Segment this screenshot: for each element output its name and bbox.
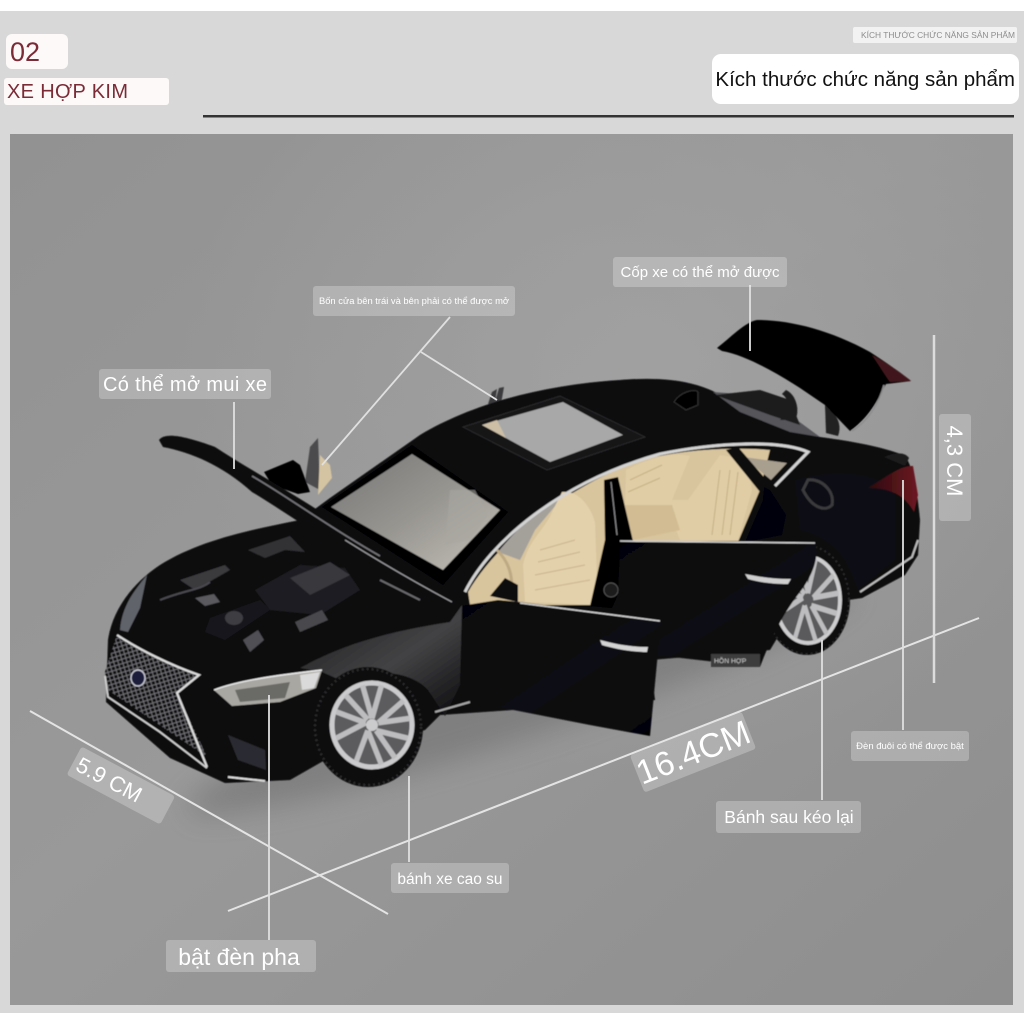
rear door frame (745, 487, 786, 542)
rear wheel (764, 545, 850, 655)
rear bumper chrome (860, 540, 918, 592)
small caption (853, 27, 1017, 43)
steering wheel (497, 550, 512, 600)
car body (106, 379, 920, 783)
grille (105, 635, 207, 768)
series number badge (6, 34, 68, 69)
roof sheen (430, 383, 735, 480)
trunk opening highlight (713, 392, 820, 437)
label: length 16.4CM: 16.4CM (631, 713, 756, 792)
sunroof (463, 396, 645, 470)
left headlight (120, 575, 147, 632)
chin chrome (228, 777, 265, 781)
callout lines (234, 285, 903, 940)
label: hood: Có thể mở mui xe (103, 374, 267, 396)
fuel door (803, 480, 832, 508)
label: trunk (613, 257, 787, 287)
rear arch (800, 500, 918, 598)
HON HOP tag (711, 654, 760, 667)
rear seats (625, 455, 752, 540)
dimension lines (30, 335, 979, 914)
label: height 4.3 CM (939, 414, 971, 521)
front wheel (313, 667, 423, 787)
label: tail light (851, 731, 969, 761)
interior (468, 449, 770, 605)
heading (712, 54, 1019, 104)
label: hood (99, 369, 271, 399)
label: width 5.9 CM (67, 746, 175, 824)
label: pull back wheel: Bánh sau kéo lại (724, 807, 854, 827)
right headlight (214, 670, 322, 706)
label: height 4.3 CM: 4,3 CM (942, 426, 967, 496)
tail light (868, 453, 918, 512)
rear quarter sheen (795, 473, 895, 590)
label: trunk: Cốp xe có thể mở được (621, 264, 780, 281)
engine bay (130, 530, 430, 662)
series name badge: XE HỢP KIM (7, 81, 128, 103)
window chrome trim (465, 444, 808, 592)
fender (300, 605, 462, 716)
label: headlights: bật đèn pha (178, 944, 300, 970)
windshield (322, 445, 508, 585)
sill chrome (435, 702, 470, 712)
label: four doors (313, 286, 515, 316)
shark fin antenna (674, 390, 698, 410)
heading: Kích thước chức năng sản phẩm (715, 68, 1015, 91)
series name badge (4, 78, 169, 105)
label: tail light: Đèn đuôi có thể được bật (856, 741, 964, 752)
car model (105, 320, 920, 787)
quarter window (726, 447, 787, 492)
label: rubber tyres: bánh xe cao su (397, 871, 503, 888)
label: rubber tyres (391, 863, 509, 893)
front seat (523, 492, 598, 605)
window gap behind seats (498, 490, 570, 560)
lower vent (228, 735, 266, 770)
label: four doors: Bốn cửa bên trái và bên phải có thể được mở (319, 295, 509, 306)
label: pull back wheel (716, 801, 861, 833)
ground shadow (175, 556, 865, 844)
series number badge: 02 (10, 37, 40, 67)
trunk lid (717, 320, 911, 436)
small caption: KÍCH THƯỚC CHỨC NĂNG SẢN PHẨM (861, 29, 1015, 40)
front door (460, 578, 661, 736)
rear door (618, 541, 816, 667)
open hood (159, 436, 462, 606)
label: width 5.9 CM: 5.9 CM (72, 752, 146, 807)
far door tip (488, 387, 504, 404)
header rule (203, 115, 1014, 118)
label: headlights (166, 940, 316, 972)
B pillar (590, 477, 633, 608)
mirror (264, 438, 332, 495)
HON HOP tag: HỖN HỢP (714, 656, 747, 665)
front bumper lower (200, 730, 268, 780)
